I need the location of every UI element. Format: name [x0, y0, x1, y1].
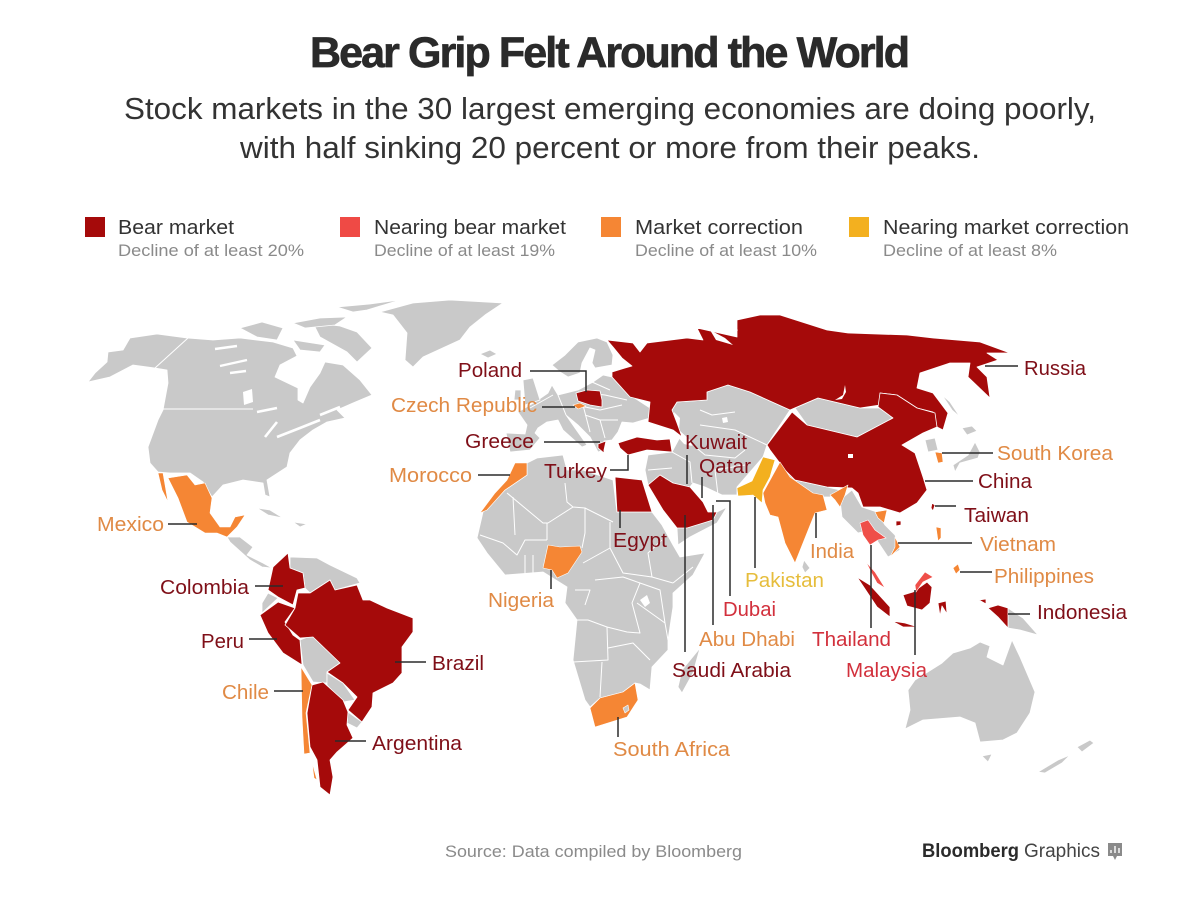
country labels [97, 358, 1128, 761]
Africa [477, 455, 705, 707]
China [767, 393, 937, 513]
label: Taiwan: Taiwan [964, 505, 1029, 527]
market correction countries [158, 403, 960, 780]
Mindanao [953, 564, 960, 574]
leader lines [168, 366, 1030, 741]
Sea cut-outs in northern Russia [710, 330, 733, 345]
Czech Republic [573, 403, 586, 409]
Baja California [158, 473, 168, 502]
Tasmania [982, 754, 992, 762]
North America [88, 334, 372, 497]
Scandinavia and Finland [552, 338, 613, 377]
subtitle: Stock markets in the 30 largest emerging economies are doing poorly, [124, 91, 1096, 126]
Qinghai lake [848, 454, 853, 458]
Sarawak and Sabah [915, 572, 933, 592]
legend [85, 217, 1129, 260]
Caspian Sea [674, 412, 692, 446]
label: Poland: Poland [458, 360, 522, 382]
legend item: nearing bear market [340, 217, 566, 260]
label: Colombia: Colombia [160, 577, 250, 599]
label: Vietnam: Vietnam [980, 534, 1056, 556]
legend item: nearing market correction: Nearing market correction [883, 217, 1129, 239]
Vietnam north [875, 510, 887, 523]
source note: Source: Data compiled by Bloomberg [445, 842, 742, 861]
label: India: India [810, 541, 855, 563]
Mainland Southeast Asia [840, 490, 900, 557]
label: Czech Republic: Czech Republic [391, 395, 537, 417]
Vietnam south [890, 537, 900, 557]
Nigeria [543, 545, 582, 578]
label: Indonesia: Indonesia [1037, 602, 1128, 624]
label: Brazil: Brazil [432, 653, 484, 675]
label: China: China [978, 471, 1033, 493]
North American lakes [215, 346, 247, 373]
Borneo [903, 582, 932, 610]
Hainan [896, 521, 901, 526]
label: Greece: Greece [465, 431, 534, 453]
Taiwan [931, 503, 935, 511]
label: Mexico: Mexico [97, 514, 164, 536]
subtitle [124, 91, 1096, 165]
Japan [953, 442, 980, 472]
South Korea [935, 452, 943, 463]
Caribbean [257, 508, 283, 518]
Saudi Arabia [648, 475, 717, 528]
Bloomberg Graphics logo [922, 841, 1122, 862]
Bolivia [300, 635, 340, 683]
New Zealand [1038, 755, 1070, 773]
nearing bear market countries [860, 520, 933, 592]
India [763, 462, 827, 563]
mainland Europe [506, 375, 650, 452]
Korea north [925, 438, 938, 452]
Paraguay [327, 673, 355, 702]
label: Turkey: Turkey [544, 461, 607, 483]
Arctic islands [240, 322, 283, 340]
Poland [576, 390, 602, 407]
label: Morocco: Morocco [389, 465, 472, 487]
label: Russia: Russia [1024, 358, 1087, 380]
legend item: bear market: Bear market [118, 217, 234, 239]
bear market countries [260, 315, 1010, 795]
lakes and borders [155, 338, 767, 697]
Bloomberg Graphics logo: Graphics [1024, 841, 1100, 862]
Peru [260, 602, 302, 665]
Sumatra [857, 577, 890, 617]
label: Malaysia: Malaysia [846, 660, 928, 682]
Britain [523, 378, 540, 405]
Egypt [615, 477, 652, 512]
Luzon [936, 527, 941, 541]
legend item: market correction [601, 217, 817, 260]
Argentina [307, 682, 353, 795]
Madagascar [678, 648, 700, 693]
Venezuela and the Guianas [290, 557, 360, 593]
legend item: nearing bear market: Decline of at least 19% [374, 241, 555, 260]
label: Abu Dhabi: Abu Dhabi [699, 629, 795, 651]
Russia [607, 315, 1010, 437]
label: Chile: Chile [222, 682, 269, 704]
label: Argentina: Argentina [372, 733, 463, 755]
label: Nigeria: Nigeria [488, 590, 555, 612]
label: Kuwait: Kuwait [685, 432, 747, 454]
label: Thailand: Thailand [812, 629, 891, 651]
Colombia [268, 553, 305, 605]
label: South Africa: South Africa [613, 739, 731, 761]
Arabian south [677, 507, 727, 545]
Sri Lanka [802, 560, 810, 573]
Ireland [514, 390, 521, 400]
label: Dubai: Dubai [723, 599, 776, 621]
Chile [301, 667, 312, 754]
Himalaya strip [785, 470, 840, 497]
Thailand [860, 520, 886, 545]
label: South Korea: South Korea [997, 443, 1114, 465]
Morocco [480, 463, 527, 513]
Greenland [380, 300, 503, 367]
Central America [227, 537, 272, 568]
Bloomberg Graphics logo: Bloomberg [922, 841, 1019, 862]
legend item: bear market [85, 217, 304, 260]
Mongolia [795, 398, 893, 437]
country borders [155, 338, 693, 697]
label: Egypt: Egypt [613, 530, 667, 552]
legend item: market correction: Market correction [635, 217, 803, 239]
label: Peru: Peru [201, 631, 244, 653]
nearing market correction country: Pakistan [737, 457, 775, 503]
Australia [905, 640, 1035, 742]
Greece [598, 441, 606, 453]
Lesotho [623, 705, 629, 713]
legend item: nearing market correction [849, 217, 1129, 260]
label: Qatar: Qatar [699, 456, 751, 478]
uncoloured land [88, 300, 1094, 773]
Java [892, 621, 918, 627]
legend item: nearing bear market: Nearing bear market [374, 217, 566, 239]
legend item: market correction: Decline of at least 10% [635, 241, 817, 260]
Central Asia and Middle East [645, 385, 790, 495]
South Africa [590, 683, 638, 727]
Peninsular Malaysia [866, 562, 885, 588]
West Papua [988, 605, 1008, 628]
legend item: nearing market correction: Decline of at least 8% [883, 241, 1057, 260]
label: Saudi Arabia: Saudi Arabia [672, 660, 792, 682]
Iceland [480, 350, 497, 358]
Turkey [618, 437, 672, 455]
title: Bear Grip Felt Around the World [310, 29, 910, 77]
Sulawesi [938, 601, 947, 616]
Ecuador [262, 593, 278, 613]
world map [88, 300, 1094, 795]
icon: chart speech bubble [1108, 843, 1122, 860]
Papua New Guinea [1008, 608, 1038, 635]
Brazil [285, 580, 413, 722]
Uruguay [347, 712, 362, 728]
legend item: bear market: Decline of at least 20% [118, 241, 304, 260]
Mexico [168, 475, 245, 537]
label: Philippines: Philippines [994, 566, 1094, 588]
India northeast [830, 485, 848, 507]
label: Pakistan: Pakistan [745, 570, 824, 592]
subtitle: with half sinking 20 percent or more from their peaks. [239, 130, 980, 165]
